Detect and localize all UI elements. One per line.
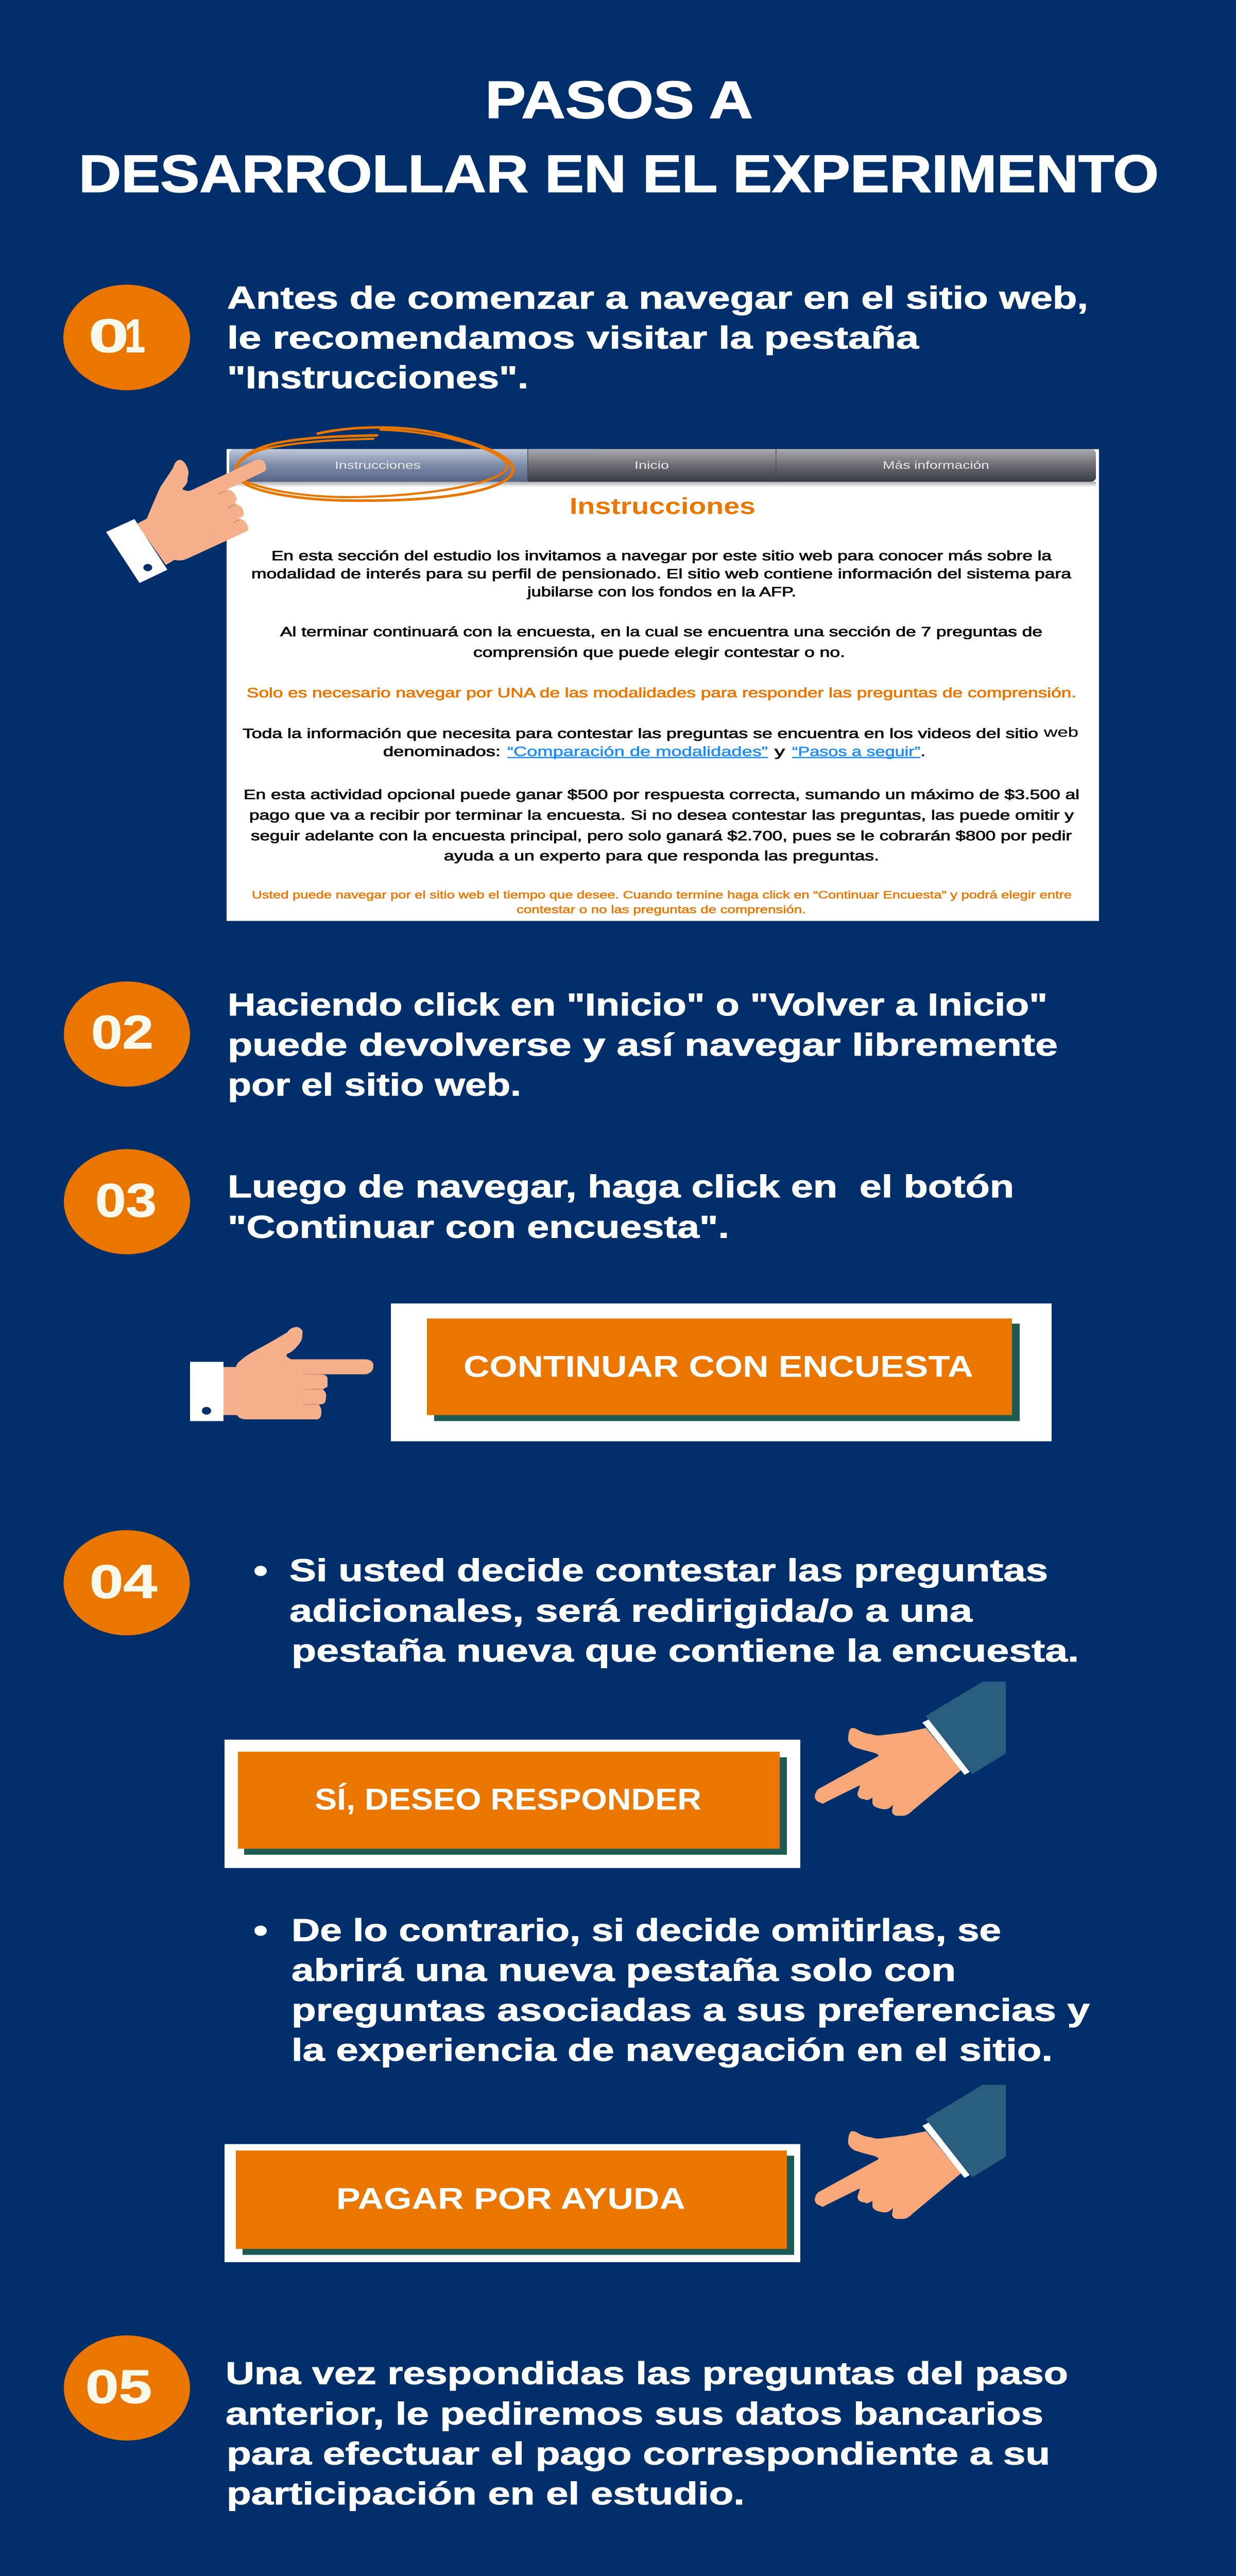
button: si deseo responder [225, 1740, 800, 1868]
navigation bar [229, 449, 1096, 487]
panel heading: Instrucciones [570, 494, 756, 519]
survey paragraph [280, 624, 1042, 660]
navigation bar: Inicio [634, 459, 669, 471]
bullet text: if omitting: De lo contrario, si decide omitirlas, se [291, 1912, 1001, 1948]
hand-drawn orange circle around tab [236, 428, 513, 501]
icon: hand pointing right [190, 1327, 373, 1421]
orange footer note: contestar o no las preguntas de comprensión. [517, 903, 806, 916]
step 01 text: le recomendamos visitar la pestaña [227, 320, 919, 355]
videos paragraph with links: Toda la información que necesita para contestar las preguntas se encuentra en los videos del sitio [243, 726, 1038, 741]
panel: instrucciones screenshot [227, 447, 1099, 921]
step 05 text: participación en el estudio. [227, 2476, 745, 2511]
payment paragraph: pago que va a recibir por terminar la encuesta. Si no desea contestar las preguntas, las puede omitir y [249, 808, 1074, 823]
number badge 05 [64, 2335, 190, 2441]
button: si deseo responder: SÍ, DESEO RESPONDER [315, 1783, 701, 1816]
step 03 text [228, 1169, 1014, 1245]
step 03 text: "Continuar con encuesta". [228, 1209, 729, 1245]
button: continuar con encuesta: CONTINUAR CON ENCUESTA [464, 1350, 973, 1383]
bullet text: if omitting [254, 1912, 1090, 2068]
title [79, 71, 1159, 203]
step 05 [64, 2335, 1068, 2511]
bullet text: if answering [254, 1553, 1079, 1669]
number badge 02 [64, 981, 190, 1087]
step 02 text: puede devolverse y así navegar libremente [228, 1027, 1058, 1063]
payment paragraph: En esta actividad opcional puede ganar $500 por respuesta correcta, sumando un máximo de $3.500 al [244, 787, 1079, 802]
payment paragraph: ayuda a un experto para que responda las preguntas. [444, 849, 879, 863]
number badge 01: 0 [89, 310, 129, 362]
title: DESARROLLAR EN EL EXPERIMENTO [79, 144, 1159, 203]
step 01 [63, 280, 1088, 395]
number badge 03 [64, 1149, 190, 1255]
step 05 text: Una vez respondidas las preguntas del paso [226, 2355, 1068, 2391]
videos paragraph with links: y [775, 744, 785, 759]
title: PASOS A [485, 71, 753, 129]
icon: hand pointing at tab [106, 460, 266, 583]
videos paragraph with links: “Pasos a seguir” [792, 744, 920, 759]
number badge 01 [63, 284, 190, 391]
number badge 05: 05 [85, 2361, 152, 2413]
bullet text: if omitting: preguntas asociadas a sus preferencias y [291, 1992, 1090, 2028]
bullet text: if omitting: la experiencia de navegación en el sitio. [291, 2032, 1053, 2068]
number badge 01: 1 [125, 310, 145, 362]
step 01 text: "Instrucciones". [227, 360, 528, 395]
step 02 text [228, 987, 1058, 1103]
survey paragraph: comprensión que puede elegir contestar o no. [473, 645, 845, 660]
intro paragraph: jubilarse con los fondos en la AFP. [527, 585, 796, 600]
orange footer note [252, 889, 1072, 916]
number badge 04: 04 [90, 1555, 157, 1608]
step 04 [64, 1530, 1079, 1669]
videos paragraph with links [243, 725, 1078, 759]
bullet text: if answering: Si usted decide contestar las preguntas [289, 1553, 1048, 1588]
step 05 text [226, 2355, 1068, 2511]
navigation bar: Más información [883, 459, 989, 471]
step 03 text: Luego de navegar, haga click en el botón [228, 1169, 1014, 1205]
step 02 text: por el sitio web. [228, 1067, 521, 1103]
step 02 text: Haciendo click en "Inicio" o "Volver a Inicio" [228, 987, 1048, 1022]
payment paragraph [244, 787, 1079, 863]
step 02 [64, 981, 1058, 1103]
button: pagar por ayuda: PAGAR POR AYUDA [336, 2182, 685, 2215]
number badge 04 [64, 1530, 190, 1635]
intro paragraph [251, 549, 1071, 600]
step 05 text: anterior, le pediremos sus datos bancarios [226, 2396, 1043, 2431]
intro paragraph: En esta sección del estudio los invitamos a navegar por este sitio web para conocer más sobre la [271, 549, 1052, 564]
step 01 text [227, 280, 1088, 395]
videos paragraph with links: “Comparación de modalidades” [507, 744, 768, 759]
button: continuar con encuesta [391, 1303, 1052, 1442]
number badge 03: 03 [95, 1174, 157, 1227]
videos paragraph with links: . [921, 744, 925, 759]
icon: hand pointing at si deseo responder [815, 1682, 1006, 1816]
navigation bar: Instrucciones [335, 459, 421, 471]
step 05 text: para efectuar el pago correspondiente a su [227, 2436, 1050, 2471]
videos paragraph with links: web [1043, 725, 1078, 740]
payment paragraph: seguir adelante con la encuesta principal, pero solo ganará $2.700, pues se le cobrarán $800 por pedir [251, 828, 1072, 843]
step 01 text: Antes de comenzar a navegar en el sitio web, [227, 280, 1088, 316]
icon: hand pointing at pagar por ayuda [815, 2085, 1006, 2219]
bullet text: if answering: adicionales, será redirigida/o a una [289, 1593, 973, 1629]
intro paragraph: modalidad de interés para su perfil de pensionado. El sitio web contiene información del sistema para [251, 567, 1071, 582]
step 03 [64, 1149, 1014, 1255]
number badge 02: 02 [91, 1006, 153, 1059]
bullet text: if omitting: abrirá una nueva pestaña solo con [291, 1953, 956, 1988]
bullet text: if answering: pestaña nueva que contiene la encuesta. [291, 1633, 1079, 1669]
videos paragraph with links: denominados: [383, 744, 501, 759]
button: pagar por ayuda [225, 2144, 800, 2262]
orange footer note: Usted puede navegar por el sitio web el tiempo que desee. Cuando termine haga click en “Continuar Encuesta” y podrá elegir entre [252, 889, 1072, 902]
survey paragraph: Al terminar continuará con la encuesta, en la cual se encuentra una sección de 7 preguntas de [280, 624, 1042, 639]
orange note: Solo es necesario navegar por UNA de las modalidades para responder las preguntas de comprensión. [247, 686, 1076, 701]
